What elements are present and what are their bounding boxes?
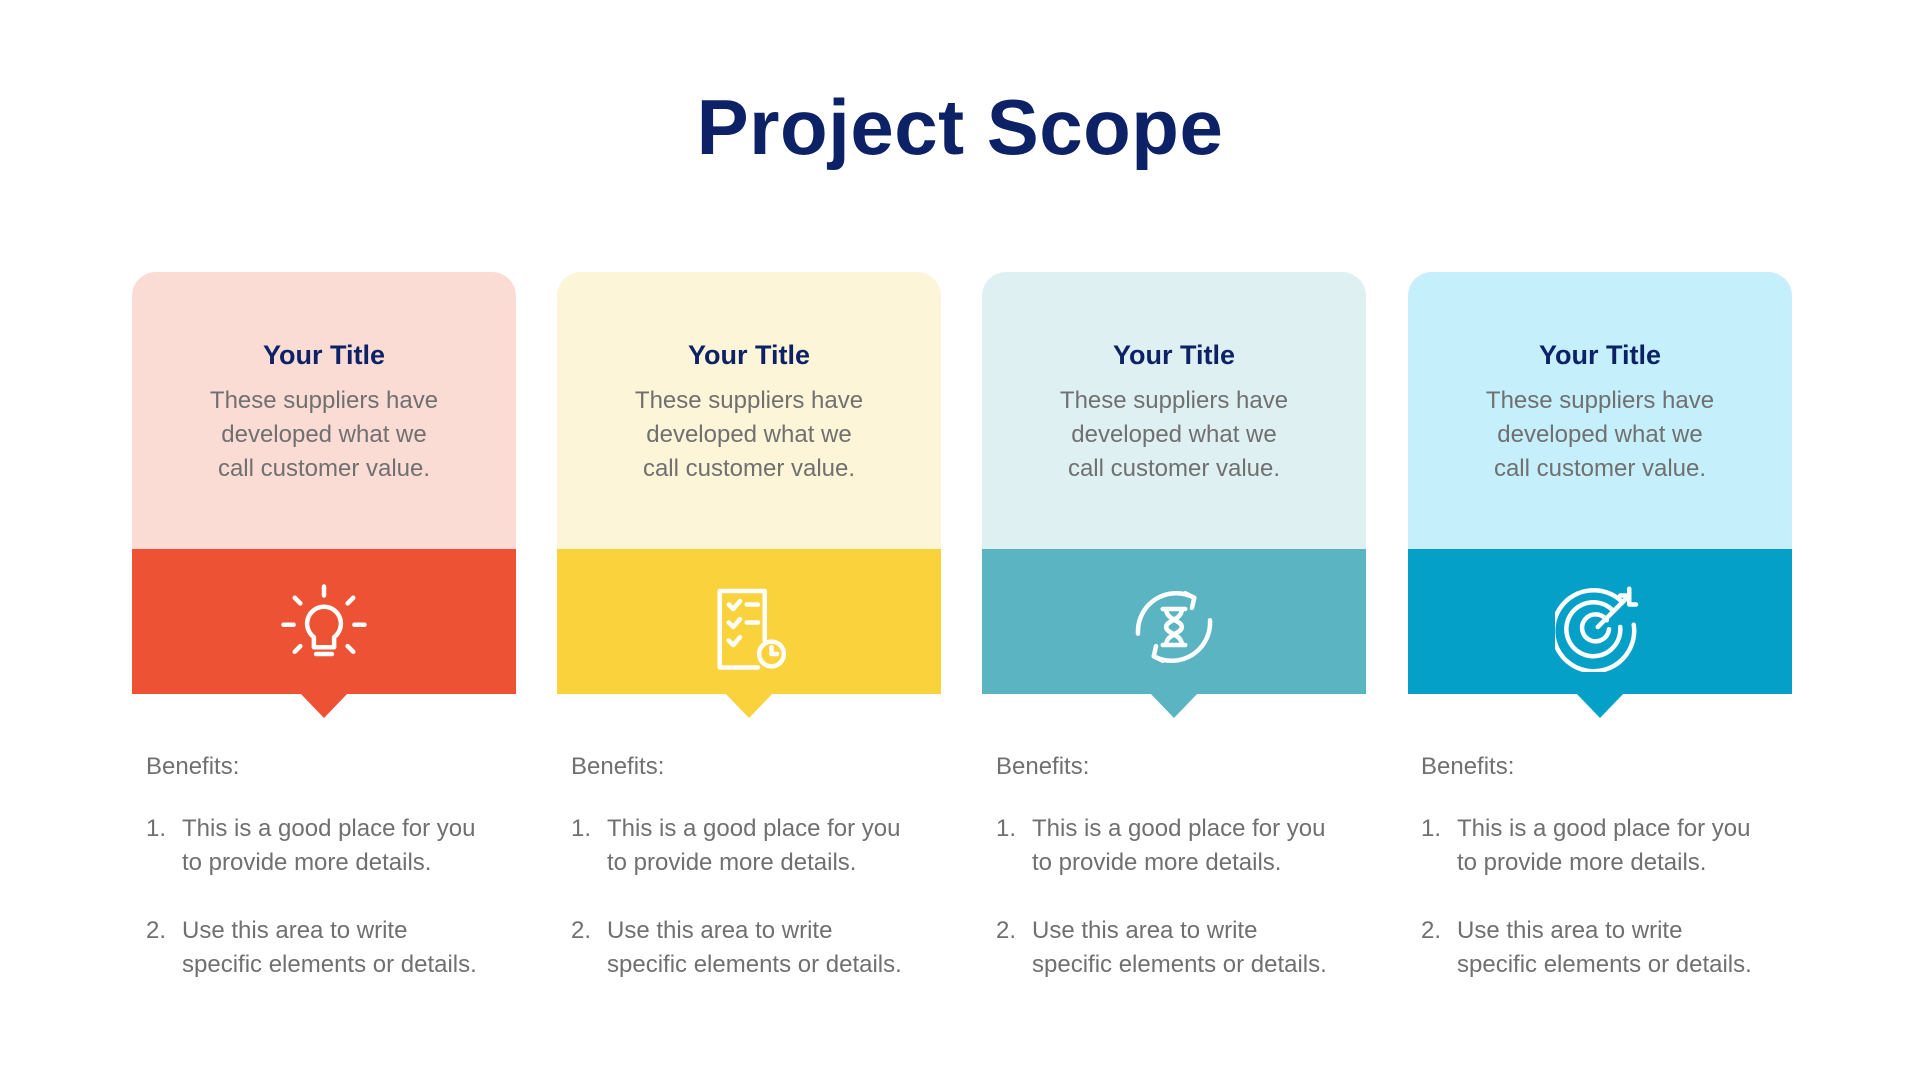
card 2 text [635, 387, 863, 482]
card 2 text: These suppliers have [635, 387, 863, 414]
card 3 top [982, 272, 1366, 549]
card 2 pointer [724, 692, 774, 718]
card 4 top [1408, 272, 1792, 549]
benefits 4: Use this area to write specific elements or details. [1457, 917, 1752, 978]
benefits 3: Use this area to write specific elements or details. [1032, 917, 1327, 978]
benefits 1: Benefits: [146, 753, 239, 780]
benefits 1: This is a good place for you to provide more details. [182, 815, 476, 876]
card 1 text [210, 387, 438, 482]
panel: card 2 [557, 272, 941, 718]
benefits 3: 2. [996, 917, 1016, 944]
card 1 text: call customer value. [218, 455, 430, 482]
benefits 2 [571, 753, 902, 978]
card 3 text [1060, 387, 1288, 482]
card 3 text: developed what we [1071, 421, 1277, 448]
benefits 4: This is a good place for you to provide more details. [1457, 815, 1750, 876]
card 2 heading: Your Title [688, 340, 810, 370]
card 2 top [557, 272, 941, 549]
card 1 heading: Your Title [263, 340, 385, 370]
title: Project Scope [697, 83, 1223, 171]
card 4 pointer [1575, 692, 1625, 718]
card 1 text: These suppliers have [210, 387, 438, 414]
panel: card 1 [132, 272, 516, 718]
card 1 band [132, 549, 516, 694]
card 3 text: These suppliers have [1060, 387, 1288, 414]
card 2 text: developed what we [646, 421, 852, 448]
card 1 text: developed what we [221, 421, 427, 448]
icon: target [1555, 586, 1638, 672]
benefits 1: 1. [146, 815, 166, 842]
benefits 1: 2. [146, 917, 166, 944]
panel: card 3 [982, 272, 1366, 718]
card 3 pointer [1149, 692, 1199, 718]
card 4 text: These suppliers have [1486, 387, 1714, 414]
benefits 2: 1. [571, 815, 591, 842]
card 3 text: call customer value. [1068, 455, 1280, 482]
benefits 2: 2. [571, 917, 591, 944]
card 4 text: call customer value. [1494, 455, 1706, 482]
benefits 2: Use this area to write specific elements or details. [607, 917, 902, 978]
icon: checklist [718, 588, 786, 670]
card 3 band [982, 549, 1366, 694]
benefits 4: 1. [1421, 815, 1441, 842]
benefits 4: 2. [1421, 917, 1441, 944]
benefits 1 [146, 753, 477, 978]
benefits 3 [996, 753, 1327, 978]
card 4 heading: Your Title [1539, 340, 1661, 370]
card 4 text [1486, 387, 1714, 482]
card 2 text: call customer value. [643, 455, 855, 482]
benefits 3: This is a good place for you to provide more details. [1032, 815, 1326, 876]
benefits 3: 1. [996, 815, 1016, 842]
benefits 2: Benefits: [571, 753, 664, 780]
panel: card 4 [1408, 272, 1792, 718]
benefits 4: Benefits: [1421, 753, 1514, 780]
benefits 1: Use this area to write specific elements or details. [182, 917, 477, 978]
card 4 band [1408, 549, 1792, 694]
benefits 2: This is a good place for you to provide more details. [607, 815, 900, 876]
icon: lightbulb [281, 584, 367, 656]
icon: hourglass cycle [1136, 591, 1212, 663]
card 4 text: developed what we [1497, 421, 1703, 448]
card 3 heading: Your Title [1113, 340, 1235, 370]
benefits 3: Benefits: [996, 753, 1089, 780]
benefits 4 [1421, 753, 1752, 978]
card 2 band [557, 549, 941, 694]
card 1 top [132, 272, 516, 549]
card 1 pointer [299, 692, 349, 718]
